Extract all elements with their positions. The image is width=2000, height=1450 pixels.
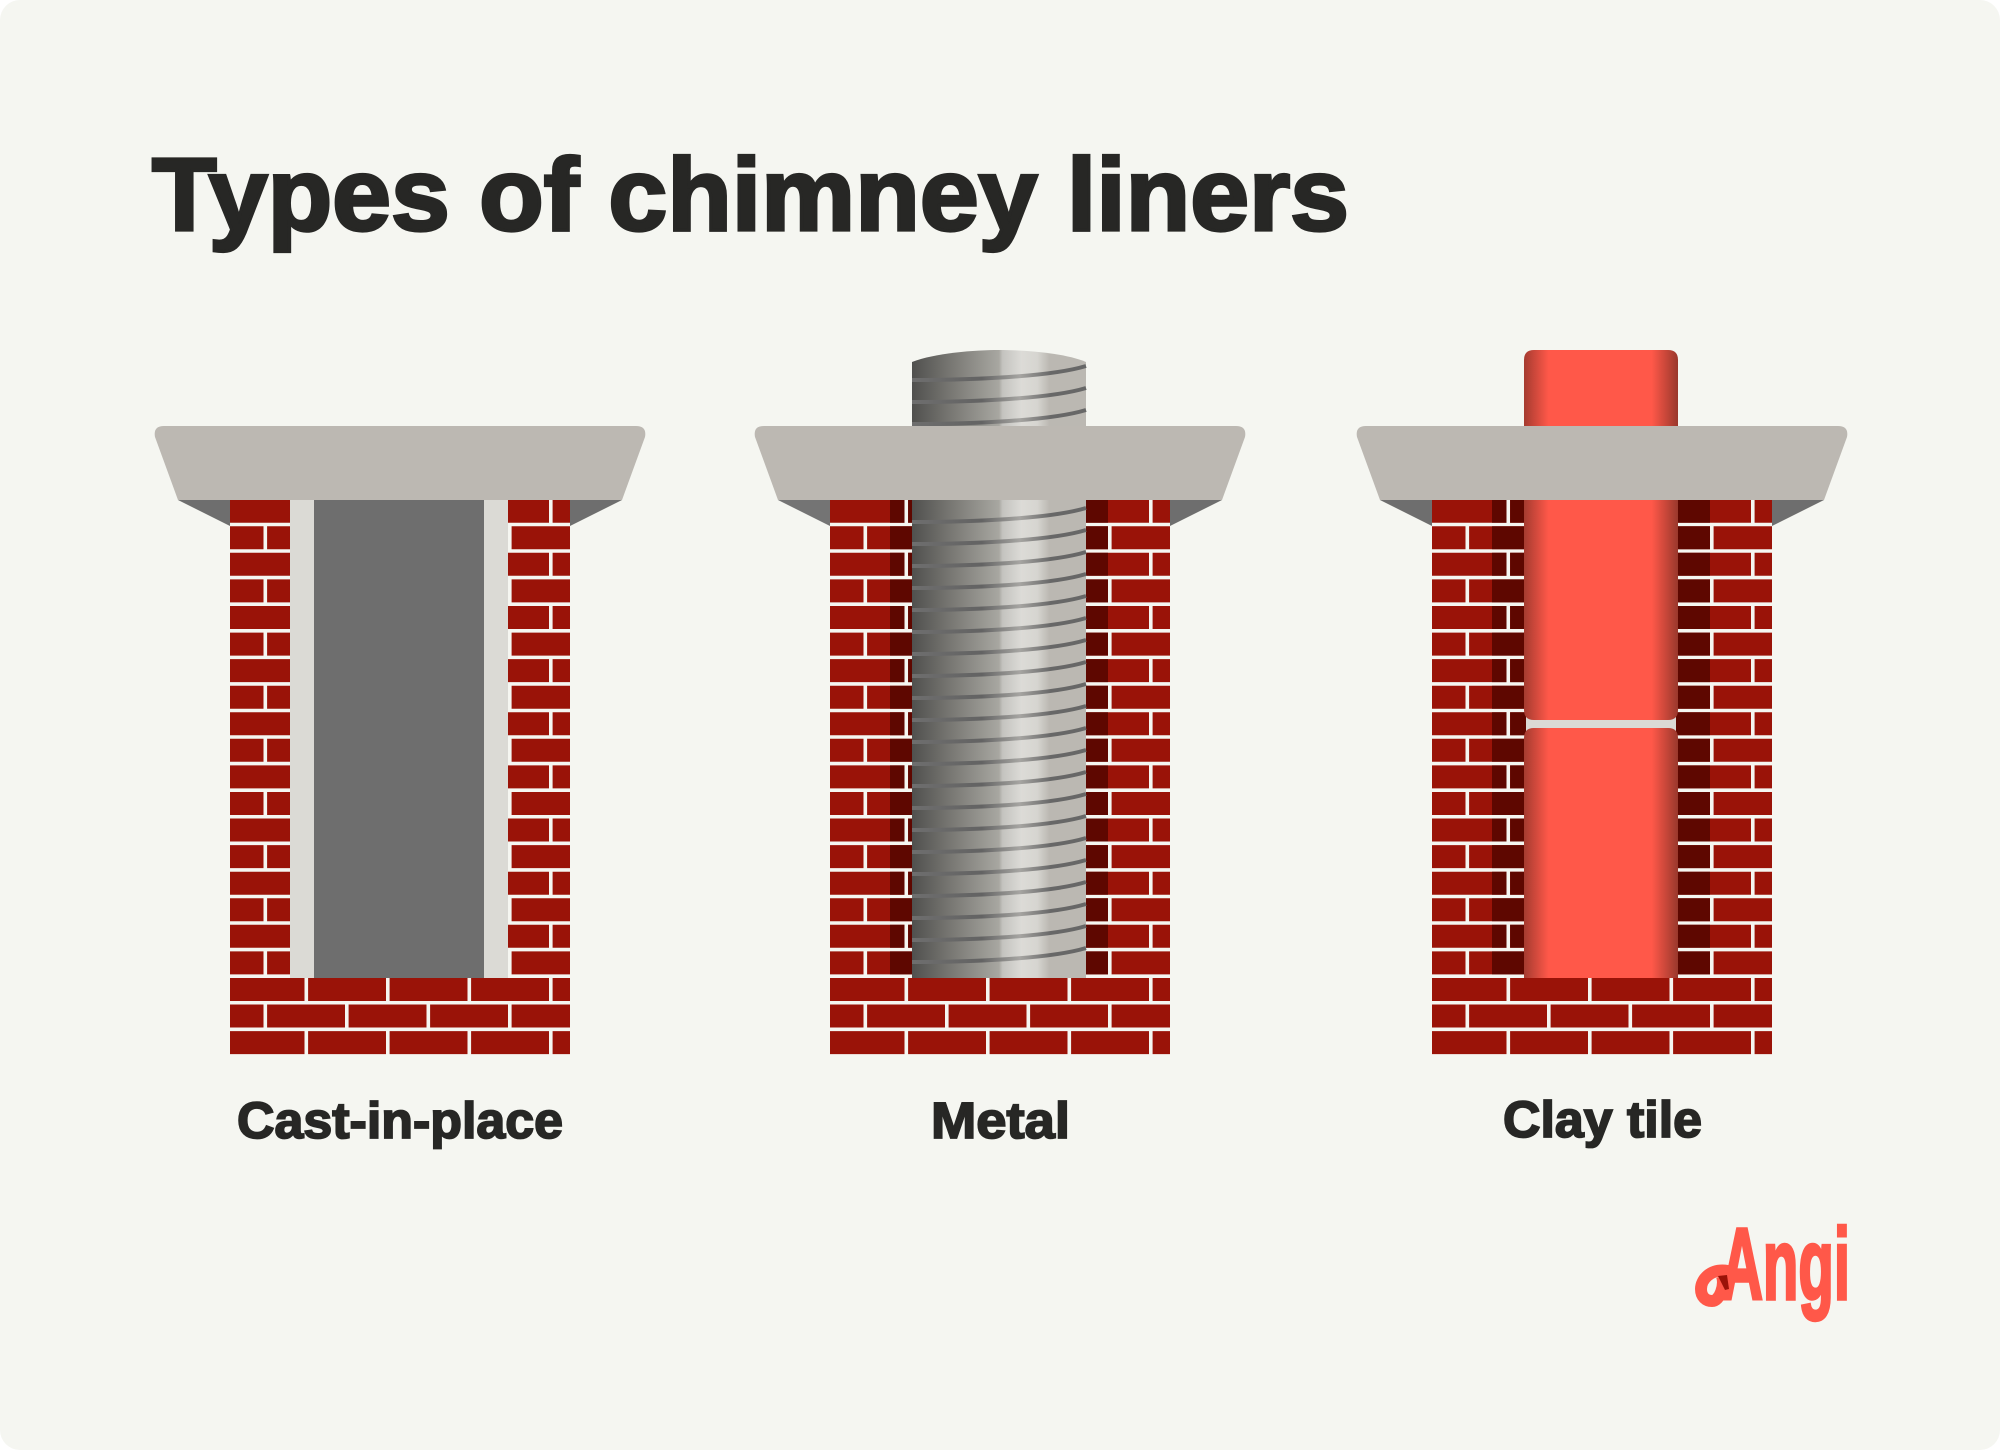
brick wall <box>830 511 1170 1043</box>
logo: Angi <box>1701 1209 1850 1321</box>
brick wall <box>1432 511 1772 1043</box>
lower clay tile <box>1524 728 1678 978</box>
dark inner brick band <box>1492 500 1710 974</box>
label: cast-in-place: Cast-in-place <box>237 1092 563 1149</box>
logo wordmark: Angi <box>1721 1209 1850 1321</box>
panel: clay tile chimney <box>1357 350 1847 1043</box>
label: clay tile: Clay tile <box>1503 1091 1702 1148</box>
concrete cap <box>755 426 1245 500</box>
panel: cast-in-place chimney <box>155 426 645 1043</box>
concrete cap <box>155 426 645 500</box>
metal liner <box>912 350 1086 978</box>
cap shadow right <box>570 500 622 526</box>
concrete cap <box>1357 426 1847 500</box>
logo loop fold <box>1718 1275 1729 1290</box>
title: Types of chimney liners <box>152 137 1349 252</box>
cap shadow left <box>778 500 830 526</box>
upper clay tile <box>1524 350 1678 720</box>
logo loop <box>1701 1271 1728 1301</box>
cap shadow left <box>1380 500 1432 526</box>
dark inner brick band <box>890 500 1108 974</box>
metal liner ribs <box>912 366 1086 962</box>
liner: light outer layer <box>290 500 508 978</box>
cap shadow right <box>1772 500 1824 526</box>
cap shadow left <box>178 500 230 526</box>
liner: gray flue <box>314 500 484 978</box>
panel: metal chimney <box>755 350 1245 1043</box>
cap shadow right <box>1170 500 1222 526</box>
joint between clay tiles <box>1526 710 1676 738</box>
label: metal: Metal <box>931 1092 1070 1149</box>
brick wall <box>230 511 570 1043</box>
